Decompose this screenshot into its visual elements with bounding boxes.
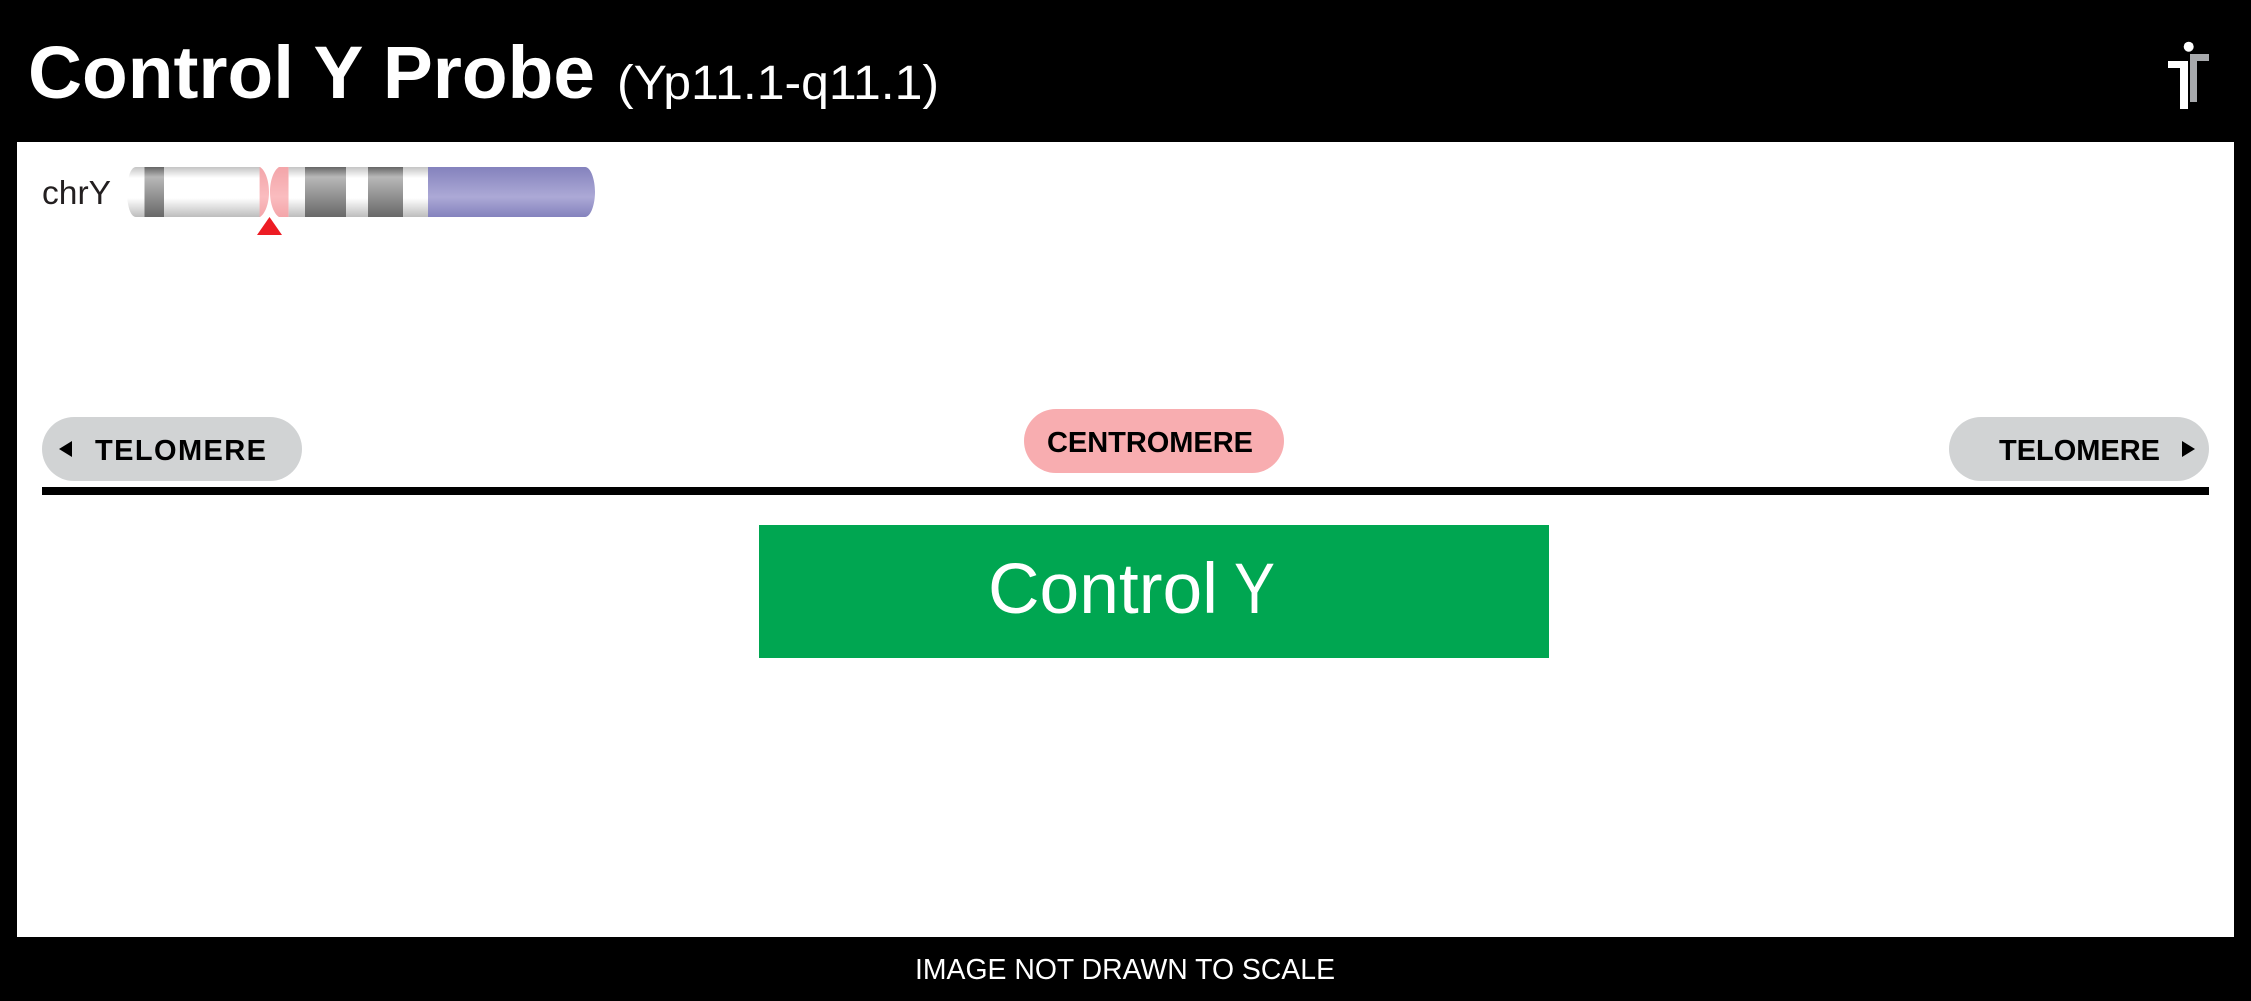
subtitle: locus: (Yp11.1-q11.1) [617, 57, 939, 110]
title [28, 31, 939, 114]
icon: logo [2168, 42, 2209, 109]
title: Control Y Probe [28, 31, 595, 114]
arrow: left [59, 441, 72, 457]
left telomere pill: TELOMERE [95, 435, 266, 467]
panel: white main area [17, 142, 2234, 937]
left telomere pill [42, 417, 302, 481]
chromosome axis line [42, 487, 2209, 495]
chromosome ideogram [125, 167, 596, 235]
chromosome label: chrY [42, 174, 111, 211]
centromere pill: CENTROMERE [1047, 427, 1253, 459]
probe bar: Control Y: Control [988, 550, 1218, 629]
right telomere pill: TELOMERE [1999, 435, 2160, 467]
arrow: right [2182, 441, 2195, 457]
footer note: IMAGE NOT DRAWN TO SCALE [915, 954, 1335, 986]
probe bar: Control Y [759, 525, 1549, 658]
probe bar: Control Y: Y [1234, 550, 1275, 629]
centromere marker [257, 217, 282, 235]
right telomere pill [1949, 417, 2209, 481]
centromere pill [1024, 409, 1284, 473]
